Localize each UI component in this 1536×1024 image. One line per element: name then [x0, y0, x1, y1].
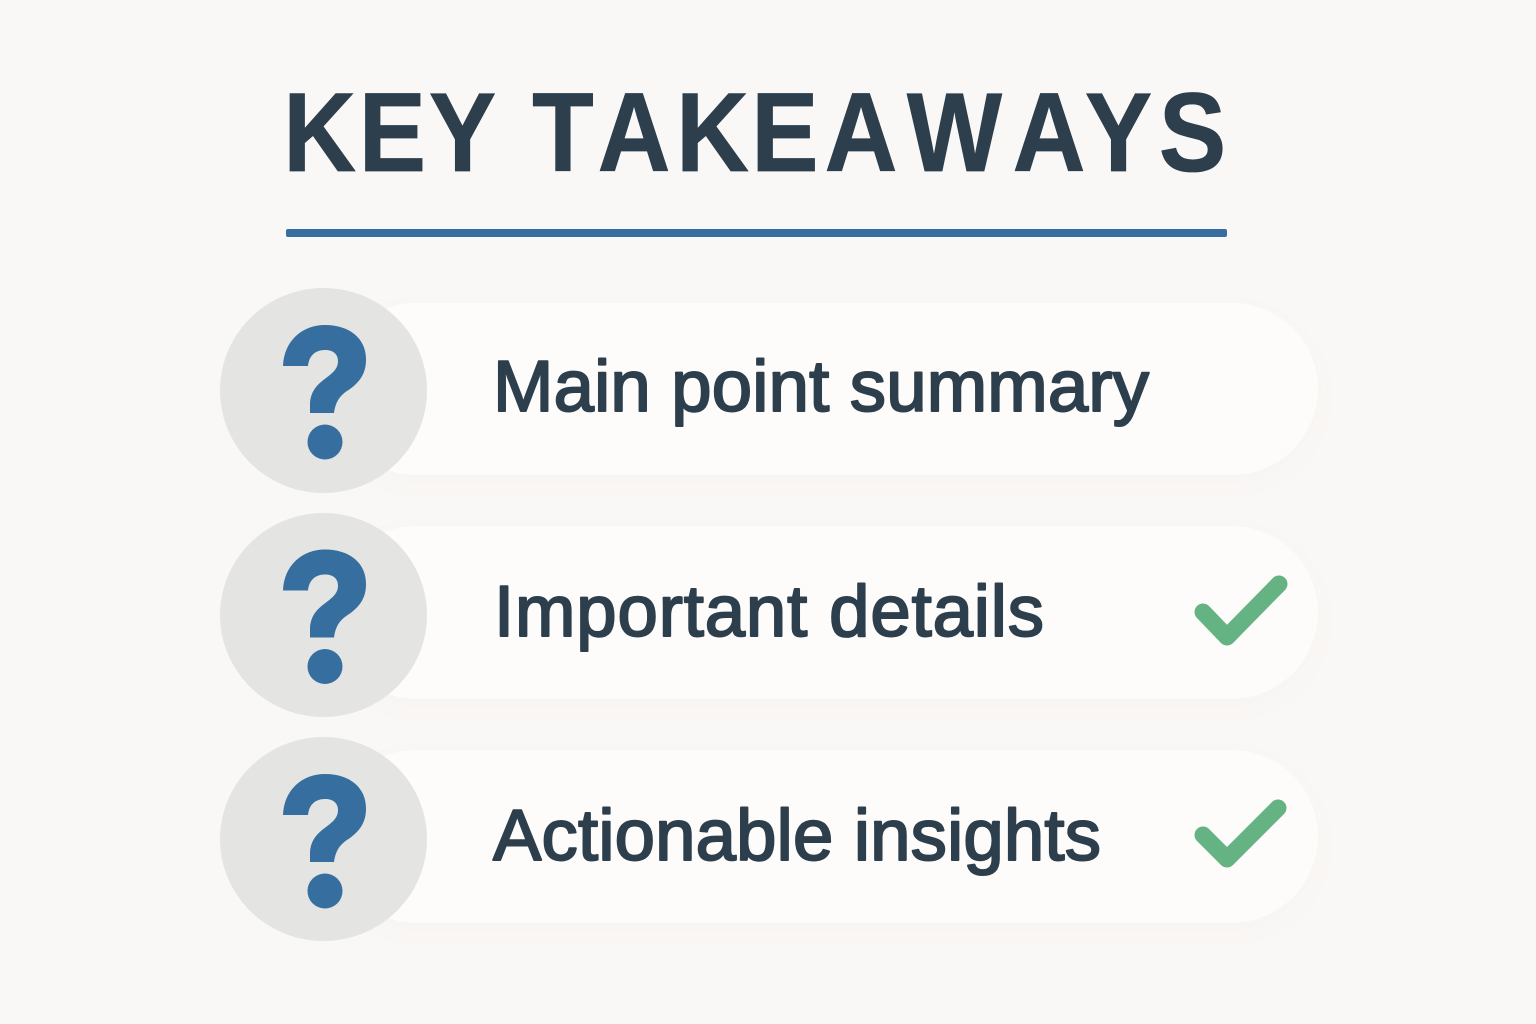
row 1 label: Main point summary	[493, 346, 1150, 427]
row 1 icon circle	[220, 288, 427, 493]
row 1: main point summary	[220, 288, 1318, 493]
row 1 pill	[330, 303, 1318, 475]
row 2: important details	[220, 513, 1318, 717]
row 3 pill	[330, 750, 1318, 923]
row 2 icon circle	[220, 513, 427, 717]
row 3: actionable insights	[220, 737, 1318, 941]
row 2 check mark	[1203, 584, 1279, 637]
title underline	[286, 229, 1227, 237]
row 2 pill	[330, 526, 1318, 699]
row 2 label: Important details	[494, 571, 1044, 652]
row 2 question mark icon	[283, 550, 366, 684]
row 3 label: Actionable insights	[493, 795, 1101, 876]
row 3 check mark	[1203, 808, 1278, 859]
title: KEY TAKEAWAYS	[283, 70, 1226, 195]
row 1 question mark icon	[283, 325, 366, 460]
row 3 question mark icon	[283, 774, 366, 908]
row 3 icon circle	[220, 737, 427, 941]
